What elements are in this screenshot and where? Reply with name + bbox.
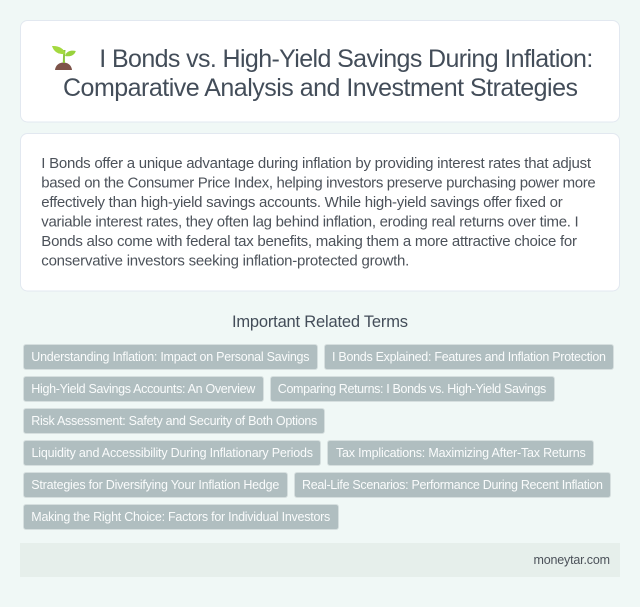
tag: risk assessment [24, 408, 324, 434]
tag: understanding inflation: Understanding Inflation: Impact on Personal Savings [31, 350, 310, 364]
text block: summary paragraph: Bonds also come with federal tax benefits, making them a more attractive choice for [41, 233, 577, 250]
tag: real-life scenarios: Real-Life Scenarios: Performance During Recent Inflation [302, 478, 603, 492]
tag: comparing returns: Comparing Returns: I Bonds vs. High-Yield Savings [278, 382, 546, 396]
title [63, 45, 593, 102]
heading: related terms: Important Related Terms [232, 313, 408, 331]
tag: liquidity [24, 440, 320, 466]
title: Comparative Analysis and Investment Strategies [63, 74, 578, 102]
text block: summary paragraph: based on the Consumer Price Index, helping investors preserve purchasing power more [41, 174, 596, 192]
tag: understanding inflation [24, 344, 318, 370]
tag: real-life scenarios [294, 472, 610, 498]
tag: diversifying strategies: Strategies for Diversifying Your Inflation Hedge [31, 478, 279, 492]
footer bar [20, 543, 620, 577]
tag: tax implications: Tax Implications: Maximizing After-Tax Returns [336, 446, 586, 460]
tag: making the right choice: Making the Right Choice: Factors for Individual Investors [31, 510, 330, 524]
related terms tags [24, 344, 614, 530]
text block: summary paragraph: variable interest rates, they often lag behind inflation, eroding real returns over time. I [41, 214, 579, 230]
text block: summary paragraph: I Bonds offer a unique advantage during inflation by providing interest rates that adjust [41, 155, 592, 172]
title: I Bonds vs. High-Yield Savings During Inflation: [99, 45, 593, 73]
tag: high-yield savings overview [24, 376, 264, 402]
tag: diversifying strategies [24, 472, 288, 498]
tag: I bonds explained: I Bonds Explained: Features and Inflation Protection [332, 350, 606, 364]
tag: high-yield savings overview: High-Yield Savings Accounts: An Overview [31, 382, 256, 396]
panel: title card [20, 20, 620, 122]
panel: summary card [20, 134, 620, 291]
footer: site name: moneytar.com [534, 553, 610, 567]
tag: comparing returns [270, 376, 554, 402]
icon: sprout [52, 46, 76, 70]
tag: liquidity: Liquidity and Accessibility During Inflationary Periods [32, 446, 313, 460]
tag: I bonds explained [324, 344, 614, 370]
tag: tax implications [328, 440, 594, 466]
tag: risk assessment: Risk Assessment: Safety and Security of Both Options [31, 414, 317, 428]
tag: making the right choice [24, 504, 338, 530]
text block: summary paragraph: effectively than high-yield savings accounts. While high-yield savings offer fixed or [41, 194, 563, 211]
text block: summary paragraph [41, 155, 596, 270]
text block: summary paragraph: conservative investors seeking inflation-protected growth. [41, 252, 409, 270]
